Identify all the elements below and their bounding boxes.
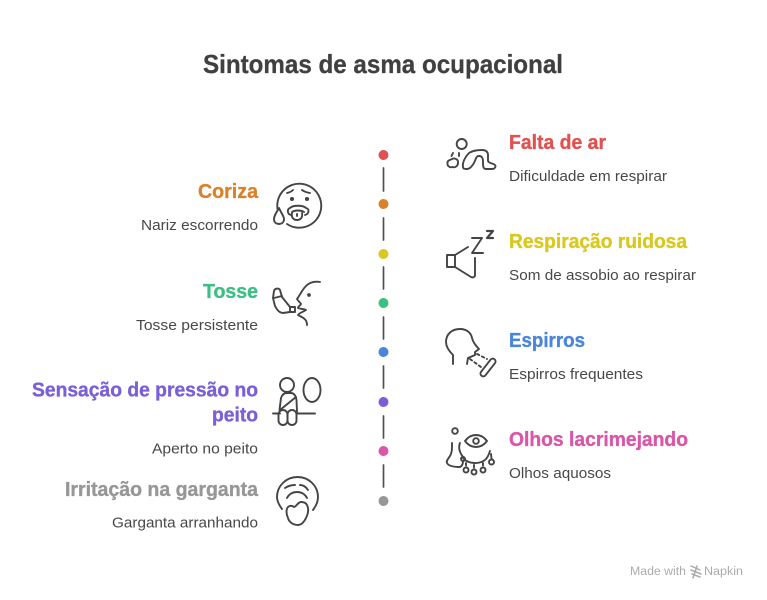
symptom: Falta de ar (447, 132, 667, 185)
icon: throat and tongue (277, 477, 318, 525)
icon: person crawling (447, 139, 496, 169)
description: Aperto no peito (152, 442, 258, 458)
footer: Made with Napkin (630, 566, 743, 578)
heading second line: peito (212, 404, 258, 426)
description: Garganta arranhando (112, 516, 258, 532)
icon: person with chest pressure (273, 378, 320, 425)
icon: speaker with z (447, 231, 493, 277)
symptom: Respiração ruidosa (447, 231, 696, 284)
symptom: Olhos lacrimejando (447, 428, 688, 482)
title: Sintomas de asma ocupacional (203, 49, 563, 79)
symptom: Coriza (141, 181, 321, 234)
heading: Tosse (203, 281, 258, 303)
description: Olhos aquosos (509, 466, 611, 482)
description: Espirros frequentes (509, 367, 643, 383)
footer text: Made with (630, 566, 686, 578)
icon: napkin logo (691, 566, 701, 578)
description: Som de assobio ao respirar (509, 268, 696, 284)
heading: Coriza (198, 181, 259, 203)
description: Nariz escorrendo (141, 218, 258, 234)
heading: Olhos lacrimejando (509, 429, 688, 451)
symptom: Sensação de pressão no peito (32, 378, 320, 458)
icon: inhaler and face (273, 282, 320, 325)
icon: sneezing head (446, 329, 497, 377)
description: Tosse persistente (136, 318, 258, 334)
heading: Espirros (509, 330, 585, 352)
icon: runny nose face (274, 184, 321, 228)
timeline (378, 150, 388, 506)
heading: Irritação na garganta (65, 479, 259, 501)
heading: Falta de ar (509, 132, 606, 154)
symptom: Irritação na garganta (65, 477, 318, 532)
footer brand: Napkin (704, 566, 743, 578)
symptom: Tosse (136, 281, 320, 334)
symptom: Espirros (446, 329, 643, 383)
description: Dificuldade em respirar (509, 169, 667, 185)
heading: Sensação de pressão no (32, 380, 258, 402)
icon: watering eye (447, 428, 494, 474)
heading: Respiração ruidosa (509, 231, 688, 253)
